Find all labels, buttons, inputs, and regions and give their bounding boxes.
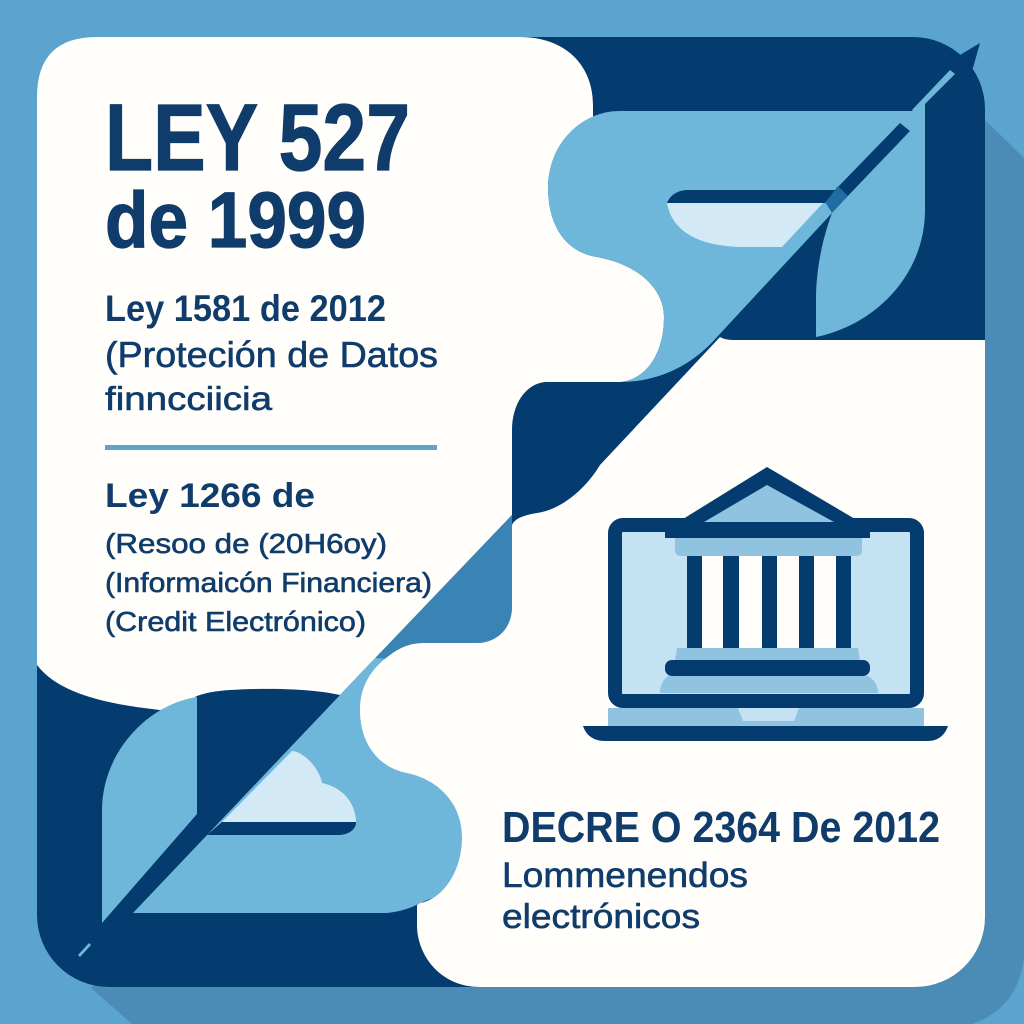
icon: quill stroke navy bbox=[836, 123, 910, 199]
icon: bottom bar bbox=[207, 822, 356, 835]
icon: pen tail mark bbox=[78, 943, 91, 957]
panel: bottom light-blue swoosh bbox=[78, 658, 480, 957]
panel: upper-left white area bbox=[37, 37, 664, 711]
title bbox=[105, 85, 410, 264]
divider bbox=[105, 445, 437, 450]
lower step bbox=[660, 676, 878, 693]
mid-blue diagonal band bbox=[340, 515, 512, 695]
column field bbox=[687, 556, 850, 648]
text block: Decreto 2364: Lommenendos bbox=[502, 856, 748, 895]
laptop stand bbox=[583, 726, 948, 741]
icon: pale bowl bbox=[667, 203, 823, 247]
title: de 1999 bbox=[105, 175, 366, 264]
pediment inner bbox=[704, 485, 834, 522]
text block: Ley 1581: Ley 1581 de 2012 bbox=[105, 288, 386, 329]
panel: lower-right white area bbox=[360, 337, 985, 987]
text block: Ley 1266: (Informaicón Financiera) bbox=[105, 567, 432, 598]
laptop screen bbox=[615, 525, 917, 701]
panel: top light-blue swoosh bbox=[548, 43, 980, 382]
upper step bbox=[675, 648, 860, 660]
text block: Decreto 2364: electrónicos bbox=[502, 898, 700, 936]
laptop notch bbox=[738, 708, 799, 721]
text block: Ley 1266: Ley 1266 de bbox=[105, 477, 315, 515]
middle step bbox=[665, 660, 870, 676]
icon: laptop with bank bbox=[583, 467, 948, 741]
text block: Ley 1581: finncciicia bbox=[105, 380, 273, 417]
text block: Ley 1581 bbox=[105, 288, 438, 417]
icon: pen tip spike bbox=[955, 43, 980, 72]
frieze bbox=[675, 538, 862, 556]
icon: bottom leaf bbox=[102, 697, 197, 923]
text block: Ley 1581: (Proteción de Datos bbox=[105, 334, 438, 375]
pediment bbox=[683, 467, 855, 525]
icon: quill stroke mid-blue section bbox=[825, 186, 848, 213]
text block: Decreto 2364 bbox=[502, 803, 940, 936]
icon: pale cloud bbox=[222, 751, 356, 822]
text block: Ley 1266: (Resoo de (20H6oy) bbox=[105, 528, 387, 559]
text block: Decreto 2364: DECRE O 2364 De 2012 bbox=[502, 803, 940, 852]
icon: pen tip line bbox=[912, 70, 955, 111]
entablature bbox=[665, 522, 870, 538]
icon: bowl rim bbox=[667, 190, 835, 203]
text block: Ley 1266 bbox=[105, 477, 432, 637]
title: LEY 527 bbox=[105, 85, 410, 191]
columns bbox=[687, 556, 851, 648]
laptop deck bbox=[608, 708, 924, 726]
text block: Ley 1266: (Credit Electrónico) bbox=[105, 606, 366, 637]
